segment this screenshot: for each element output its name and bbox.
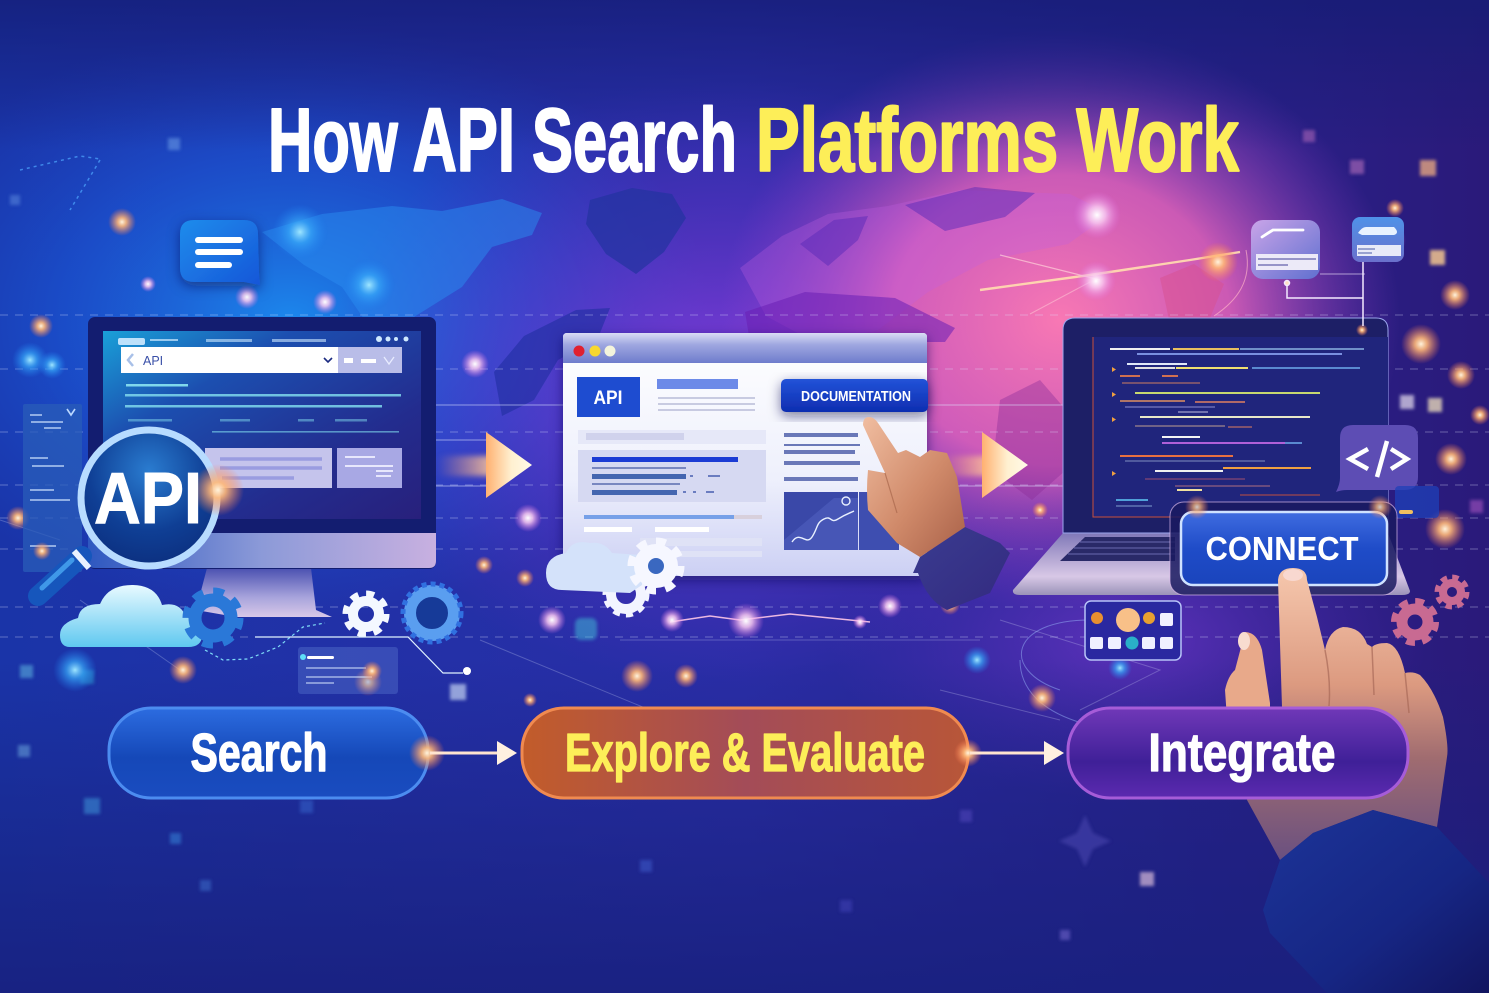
index fingernail: [1283, 569, 1303, 581]
search bar: [121, 347, 402, 373]
laptop base: [1013, 533, 1410, 595]
connect button: [1170, 495, 1397, 595]
panel: laptop: [1013, 318, 1410, 595]
keyboard: [1060, 537, 1175, 561]
particles: glowing dots: [6, 191, 1489, 712]
result lines: [125, 384, 401, 433]
handle: [38, 556, 82, 596]
data trail chart: [205, 623, 471, 675]
hand pointing at documentation: [863, 417, 1010, 610]
title: Platforms Work: [756, 91, 1240, 191]
icon: cloud with gears: [546, 541, 681, 615]
step pill: explore and evaluate: Explore & Evaluate: [565, 723, 925, 783]
code area: [1093, 337, 1388, 517]
documentation button: DOCUMENTATION: [801, 389, 911, 405]
laptop camera node: [1356, 324, 1368, 336]
sleeve: lower right: [1263, 810, 1489, 993]
monitor frame: [88, 317, 436, 569]
thumb: [1225, 632, 1270, 733]
icon: magnifying glass with API: [38, 430, 244, 596]
window title bar: [563, 333, 927, 363]
icon: magnifying glass with API: API: [94, 459, 202, 539]
connector lines: [1214, 250, 1365, 326]
hand: pressing connect: [1225, 568, 1448, 860]
documentation text lines: [784, 433, 860, 481]
monitor screen: [103, 331, 421, 519]
icon: large blue ring gear: [403, 584, 461, 642]
hand: [863, 417, 965, 557]
result cards: [205, 448, 402, 488]
API details panel: [578, 430, 766, 502]
search bar: API: [143, 354, 163, 368]
API badge: [577, 377, 640, 417]
small data card: [298, 647, 398, 694]
step pill: search: [109, 708, 428, 798]
arrow: documentation to integration: [940, 432, 1028, 498]
arrow: search to documentation: [437, 432, 532, 498]
step pill: integrate: [1068, 708, 1408, 798]
world map: [262, 187, 1224, 500]
icon: blue gear: [186, 591, 240, 645]
arrow: explore to integrate: [954, 739, 1064, 767]
step pill: search: Search: [190, 723, 328, 783]
browser toolbar: [118, 336, 408, 345]
finger creases: [1325, 647, 1409, 713]
icon: white gear: [346, 594, 386, 634]
arrow: search to explore: [409, 735, 517, 771]
heading lines: [657, 379, 755, 410]
panel: desktop monitor: [88, 317, 436, 617]
monitor stand: [196, 568, 332, 617]
laptop screen: [1063, 318, 1388, 533]
icon: cloud: [60, 585, 202, 647]
icon: menu chat bubble: [180, 220, 260, 285]
icon: code chat bubble: [1336, 425, 1418, 492]
palm and fingers: [1247, 568, 1448, 860]
lens: [81, 430, 217, 566]
diagram thumbnail: [784, 492, 899, 550]
sleeve: [913, 527, 1010, 610]
lower rows: [584, 515, 762, 557]
panel: documentation window: [563, 333, 928, 576]
title: How API Search: [268, 91, 737, 191]
small blue status bar: [1395, 486, 1439, 518]
icon: pink gears: [1394, 577, 1467, 643]
step pill: explore and evaluate: [522, 708, 968, 798]
documentation button: [781, 379, 928, 412]
connect button: CONNECT: [1206, 530, 1358, 567]
icon: app dashboard: [1085, 601, 1181, 660]
card icon: right: [1352, 217, 1404, 262]
step pill: integrate: Integrate: [1148, 723, 1336, 783]
side panel: [23, 404, 82, 572]
API badge: API: [594, 388, 622, 409]
grid and dashed network lines: [0, 156, 1489, 732]
card icon: left: [1251, 220, 1320, 279]
